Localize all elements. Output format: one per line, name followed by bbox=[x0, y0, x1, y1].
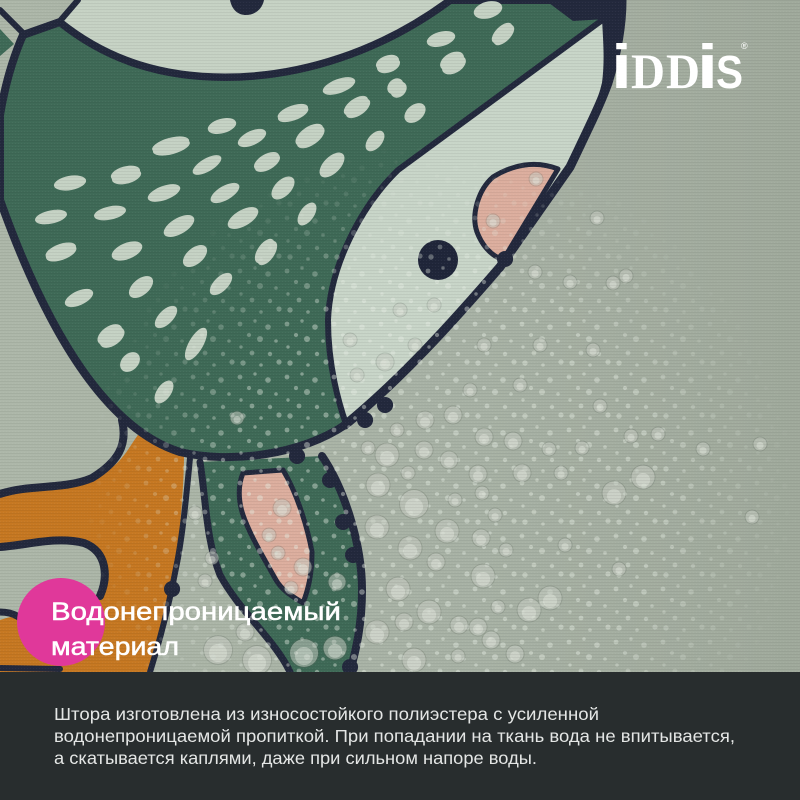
pink badge circle bbox=[17, 578, 105, 666]
logo: iDDiS bbox=[611, 33, 748, 102]
tiny water droplets bbox=[97, 161, 758, 672]
logo: iDDiS: D bbox=[666, 43, 700, 99]
fox: outer face line bbox=[345, 0, 622, 425]
logo: iDDiS: ® bbox=[741, 41, 748, 51]
fox: orange tail and legs bbox=[0, 420, 190, 672]
fox: green leaf-shaped foot with pink centre bbox=[200, 456, 362, 672]
fox: dark collar point at the top bbox=[545, 0, 624, 83]
heading: waterproof material: материал bbox=[51, 633, 179, 661]
logo: iDDiS: i bbox=[697, 33, 718, 102]
footer description band bbox=[0, 672, 800, 800]
description text: водонепроницаемой пропиткой. При попадании на ткань вода не впитывается, bbox=[54, 726, 735, 746]
fox: eye bbox=[418, 240, 458, 280]
description text: Штора изготовлена из износостойкого полиэстера с усиленной bbox=[54, 704, 599, 724]
logo: iDDiS: S bbox=[716, 46, 743, 98]
water drops bbox=[172, 179, 760, 667]
fox: green head and body bbox=[0, 0, 622, 457]
fox: pink ear bbox=[475, 164, 558, 260]
fox: pale top of the face with nose bbox=[0, 0, 450, 77]
description text bbox=[54, 704, 735, 768]
logo: iDDiS: i bbox=[611, 33, 632, 102]
logo: iDDiS: D bbox=[631, 43, 665, 99]
description text: а скатывается каплями, даже при сильном напоре воды. bbox=[54, 748, 537, 768]
fox: pale dashes on the green body bbox=[35, 1, 514, 403]
heading: waterproof material: Водонепроницаемый bbox=[51, 598, 341, 626]
fox: pale cheek panel bbox=[328, 18, 607, 424]
